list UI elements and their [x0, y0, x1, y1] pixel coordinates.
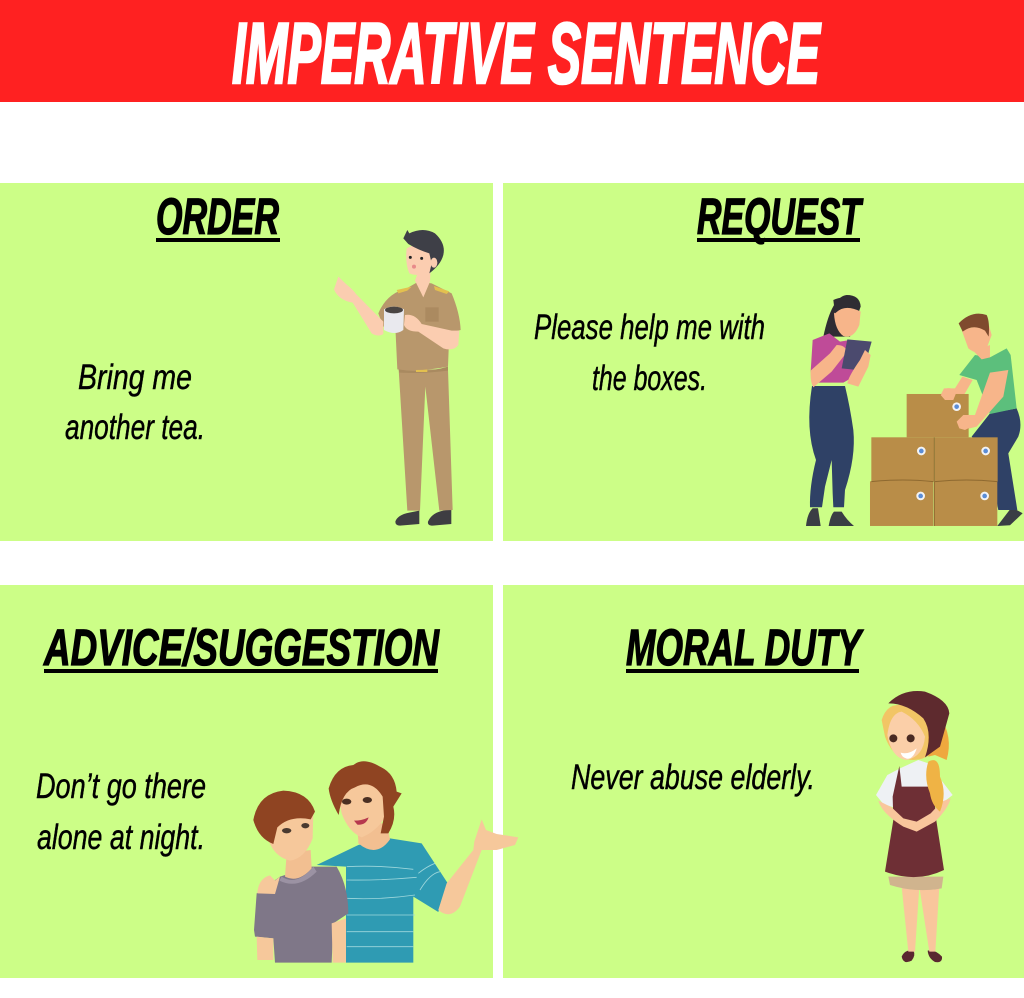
panel: advice/suggestion [0, 585, 493, 978]
icon: officer holding a mug [334, 230, 461, 526]
panel: request [503, 183, 1024, 541]
icon: woman with tablet and man stacking boxes [806, 295, 1023, 526]
icon: girl in apron and headscarf [876, 691, 953, 962]
text: request example [534, 308, 765, 398]
man [941, 314, 1023, 526]
text: advice example: Don’t go there [36, 767, 206, 806]
heading: moral duty: MORAL DUTY [626, 619, 864, 676]
text: request example: Please help me with [534, 308, 765, 347]
heading: request: REQUEST [697, 188, 864, 245]
panel: moral duty [503, 585, 1024, 978]
icon: man and boy talking [253, 761, 518, 963]
heading: request [697, 188, 864, 245]
text: advice example [36, 767, 206, 857]
heading: advice/suggestion: ADVICE/SUGGESTION [43, 619, 440, 676]
text: moral duty example: Never abuse elderly. [571, 758, 815, 797]
heading: order: ORDER [156, 188, 279, 245]
text: request example: the boxes. [592, 359, 707, 398]
panel: order [0, 183, 493, 541]
text: advice example: alone at night. [37, 818, 205, 857]
text: order example: Bring me [78, 358, 192, 397]
woman [806, 295, 872, 526]
text: order example [65, 358, 205, 447]
heading: order [156, 188, 280, 245]
boxes [870, 388, 998, 526]
text: order example: another tea. [65, 408, 205, 447]
